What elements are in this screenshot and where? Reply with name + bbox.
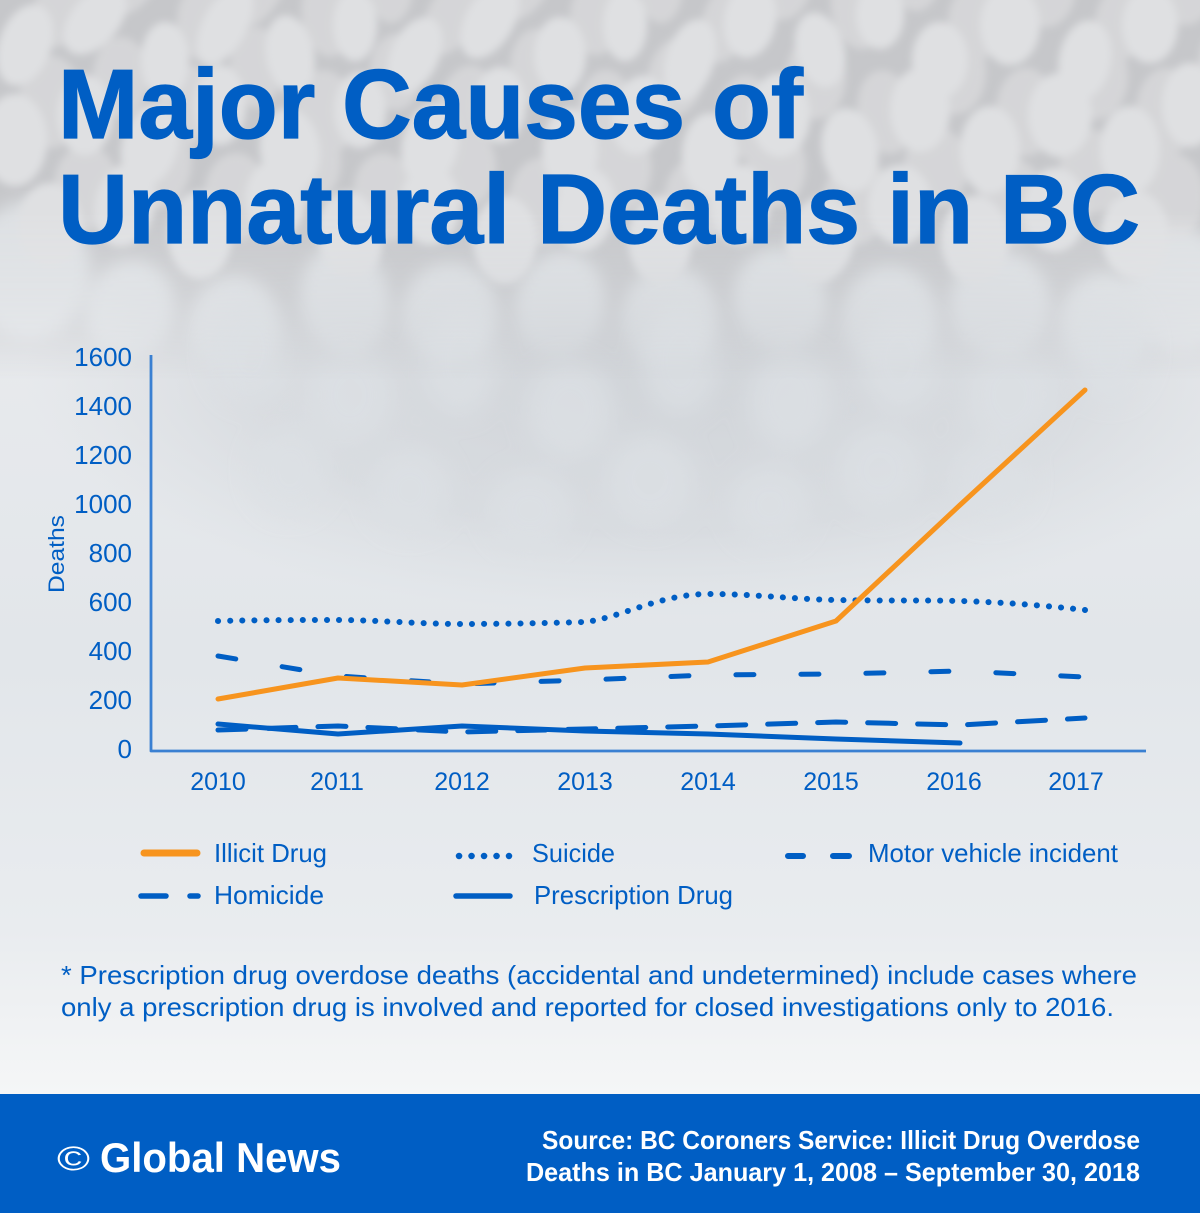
y axis labels: 600 (89, 587, 132, 617)
x axis labels: 2015 (803, 768, 859, 796)
title: Unnatural Deaths in BC (58, 154, 1140, 264)
line chart (151, 355, 1146, 751)
legend: homicide: Homicide (214, 880, 324, 910)
y axis labels: 0 (118, 734, 132, 764)
series: suicide (218, 594, 1085, 624)
series: motor vehicle incident (218, 718, 1085, 732)
y axis labels: 800 (89, 538, 132, 568)
legend: motor vehicle incident: Motor vehicle incident (868, 838, 1119, 868)
y axis labels: 1200 (74, 440, 132, 470)
title: Major Causes of (58, 49, 803, 159)
x axis labels: 2017 (1048, 768, 1104, 796)
x axis labels: 2012 (434, 768, 490, 796)
chart axes (151, 355, 1146, 751)
footer logo text: Global News (100, 1134, 341, 1181)
footer bar (0, 1094, 1200, 1213)
x axis labels: 2016 (926, 768, 982, 796)
background photo: pills top band (0, 0, 1200, 384)
x axis labels (190, 768, 1104, 796)
x axis labels: 2013 (557, 768, 613, 796)
y axis labels (74, 342, 132, 764)
y axis labels: 200 (89, 685, 132, 715)
y axis title: Deaths (44, 515, 69, 593)
x axis labels: 2010 (190, 768, 246, 796)
y axis labels: 400 (89, 636, 132, 666)
title (58, 49, 1140, 264)
legend: prescription drug: Prescription Drug (534, 880, 733, 910)
x axis labels: 2014 (680, 768, 736, 796)
legend: illicit drug: Illicit Drug (214, 838, 327, 868)
series: homicide (218, 656, 1085, 684)
series: illicit drug (218, 390, 1085, 699)
footnote (61, 960, 1137, 1022)
background photo: blurred pills lower band (0, 160, 1200, 640)
footnote: * Prescription drug overdose deaths (accidental and undetermined) include cases where (61, 960, 1137, 990)
y axis labels: 1400 (74, 391, 132, 421)
source text (526, 1125, 1140, 1187)
x axis labels: 2011 (310, 768, 364, 796)
legend (141, 838, 1119, 910)
source text: Deaths in BC January 1, 2008 – September 30, 2018 (526, 1157, 1140, 1187)
footer logo text: © (57, 1140, 90, 1178)
source text: Source: BC Coroners Service: Illicit Drug Overdose (542, 1125, 1140, 1155)
y axis labels: 1600 (74, 342, 132, 372)
footnote: only a prescription drug is involved and reported for closed investigations only to 2016. (61, 992, 1114, 1022)
series: prescription drug (218, 724, 960, 743)
y axis labels: 1000 (74, 489, 132, 519)
legend: suicide: Suicide (532, 838, 615, 868)
